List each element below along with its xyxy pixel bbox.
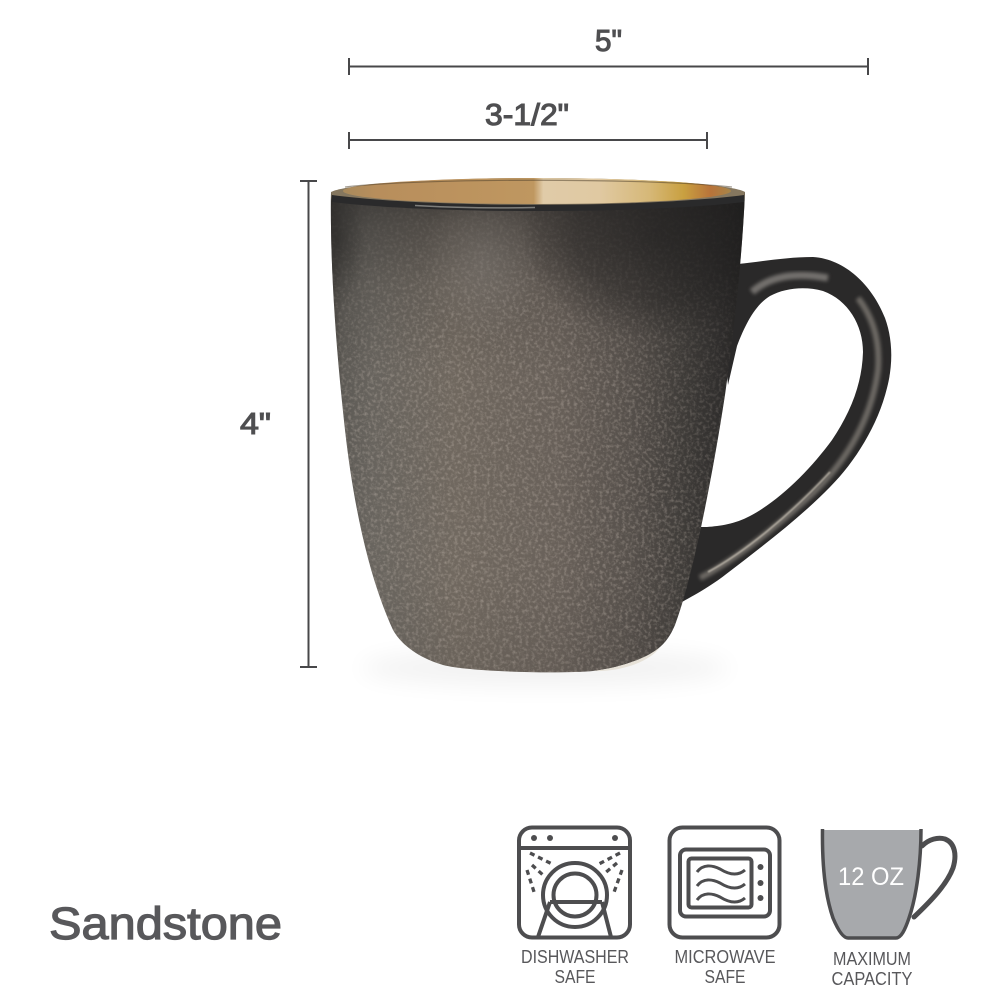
handle sheen <box>700 298 878 578</box>
capacity value: 12 OZ <box>838 863 904 891</box>
mug rim and interior <box>331 178 745 211</box>
dimension line: 5 inch <box>349 58 868 75</box>
icon: microwave safe <box>670 828 780 938</box>
label: dishwasher safe: DISHWASHER <box>521 947 629 967</box>
dimension line: 3-1/2 inch <box>349 132 707 149</box>
mug handle <box>680 250 900 610</box>
glaze shading: light top band <box>450 213 517 296</box>
glaze shading: dark right top <box>538 196 745 326</box>
dimension: 4 inch height <box>240 181 317 667</box>
mug photograph <box>330 178 892 682</box>
icon: dishwasher safe <box>519 828 630 938</box>
label: 3-1/2 inches: 3-1/2" <box>485 97 569 132</box>
foot of mug <box>593 647 660 671</box>
label: 5 inches: 5" <box>595 23 622 58</box>
label: dishwasher safe: SAFE <box>554 967 596 987</box>
label: 4 inches: 4" <box>240 406 271 441</box>
label: maximum capacity: MAXIMUM <box>833 949 911 969</box>
dimension: 3-1/2 inch width <box>349 97 707 149</box>
product name: Sandstone <box>49 898 282 949</box>
label: microwave safe: MICROWAVE <box>674 947 776 967</box>
label: microwave safe: SAFE <box>704 967 746 987</box>
label: maximum capacity: CAPACITY <box>832 969 912 989</box>
dimension: 5 inch width <box>349 23 868 75</box>
shadow under mug <box>360 650 730 686</box>
glaze shading: left edge <box>331 212 354 288</box>
icon: 12 oz maximum capacity mug <box>822 829 955 938</box>
dimension line: 4 inch <box>300 181 317 667</box>
mug body <box>330 192 745 672</box>
